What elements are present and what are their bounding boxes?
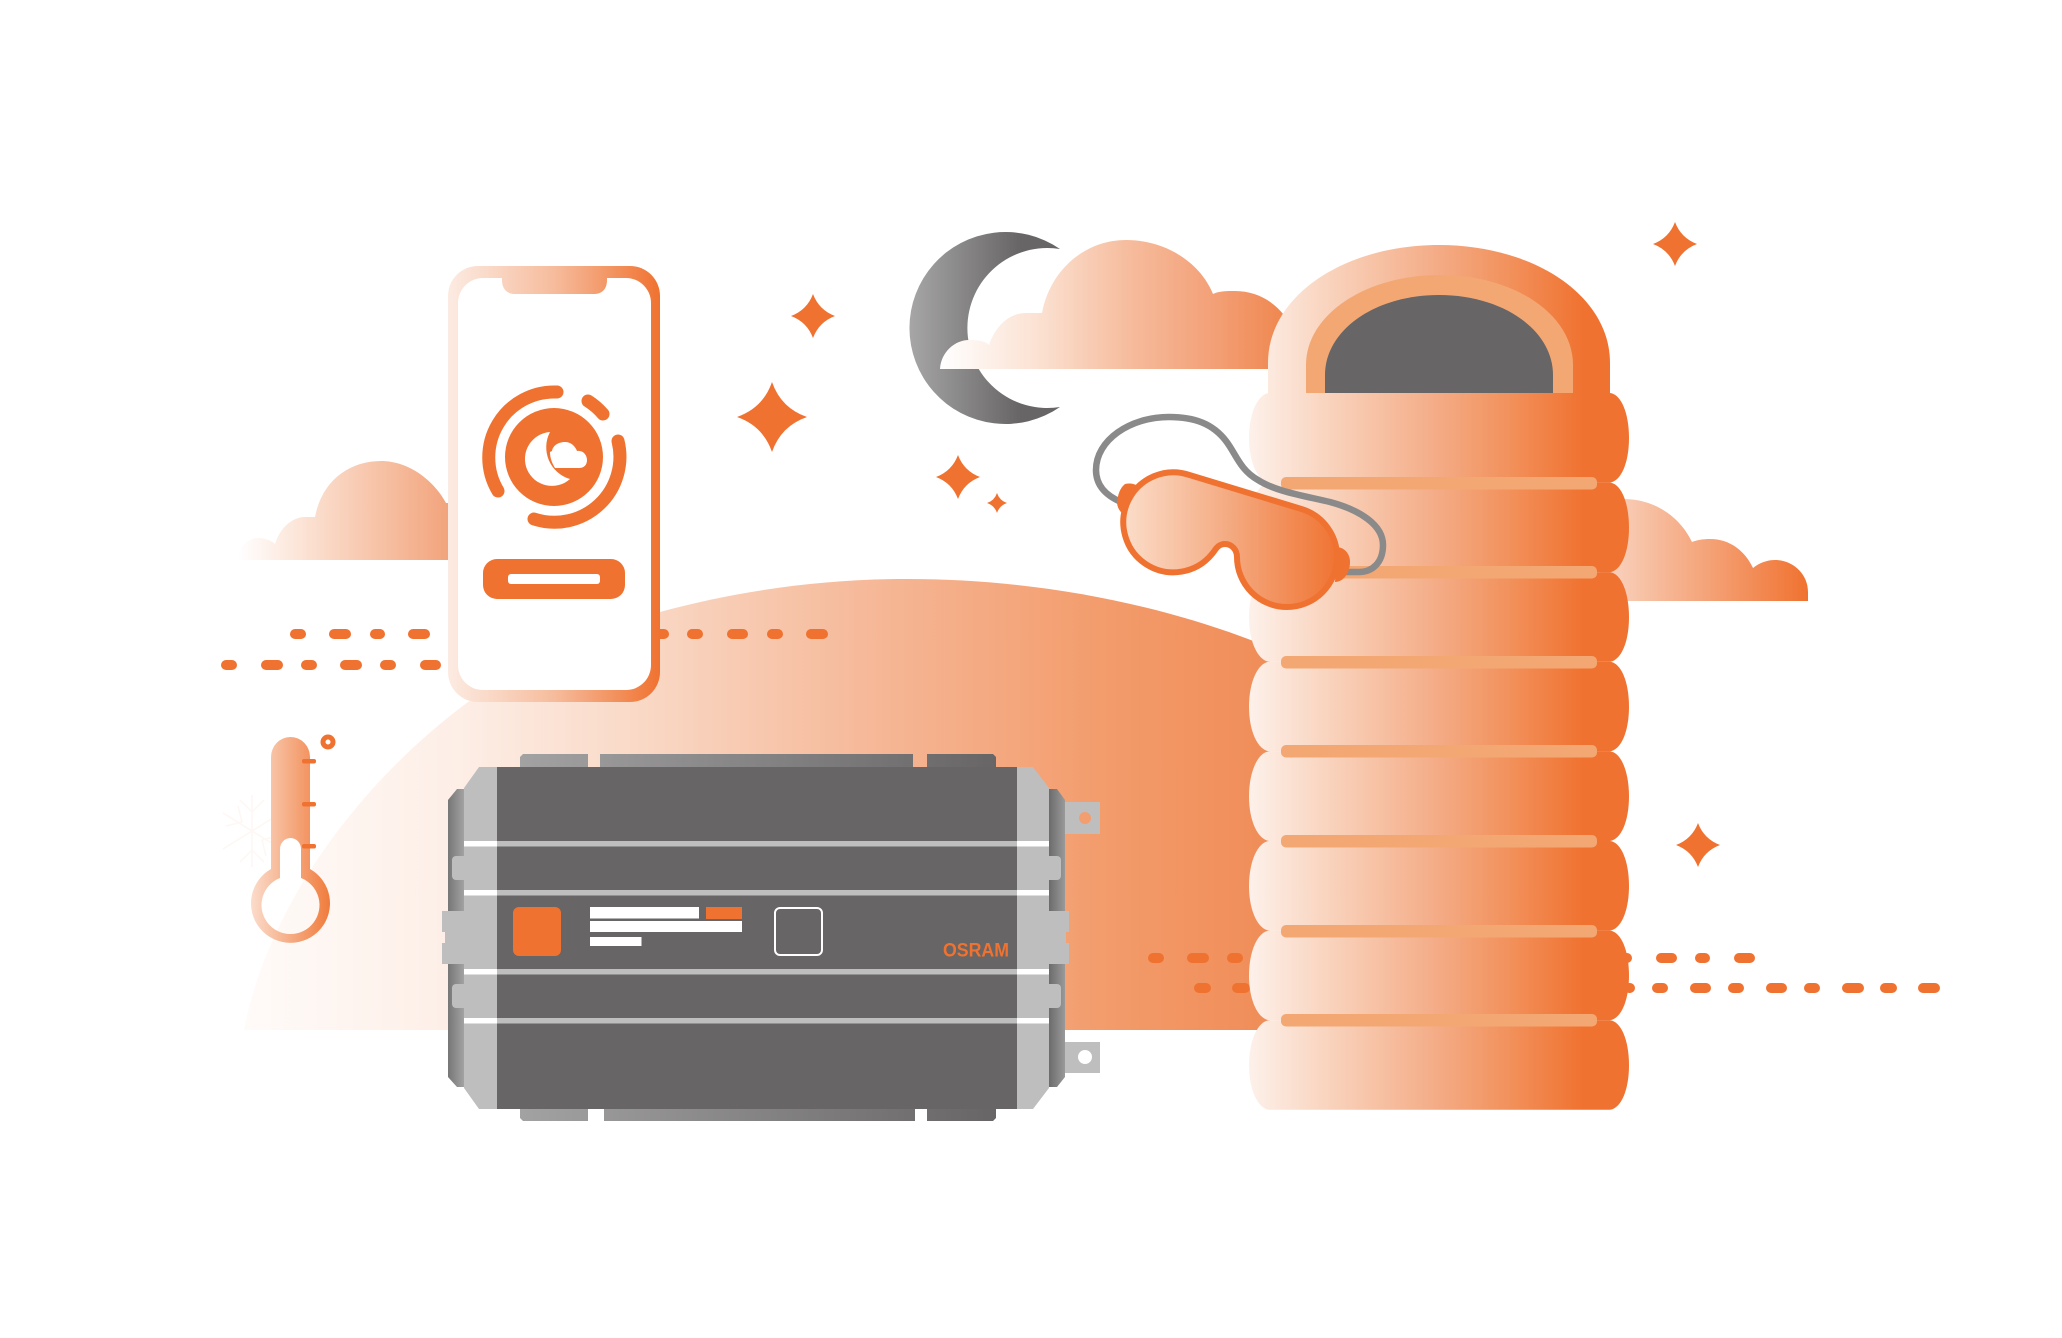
stars — [737, 222, 1720, 867]
side panels — [464, 767, 497, 1109]
mounting lugs — [1065, 802, 1100, 834]
side clips — [442, 856, 1069, 1008]
background hill — [244, 579, 1270, 1030]
sleeping bag segments — [1249, 393, 1629, 1110]
sleeping bag — [1249, 245, 1629, 1110]
icon: thermometer — [251, 737, 333, 943]
mask ear blobs — [1117, 483, 1350, 582]
sleeping bag seams — [1281, 477, 1597, 1026]
sleep mask — [1096, 417, 1383, 607]
sleeping bag hood — [1268, 245, 1610, 400]
dashed lines: upper left — [221, 629, 828, 670]
side strips — [448, 789, 464, 1087]
icon: faint snowflake — [223, 795, 281, 867]
phone button — [483, 559, 625, 599]
main body — [497, 767, 1017, 1109]
phone — [448, 266, 660, 702]
inverter box — [442, 754, 1100, 1121]
cloud: middle — [940, 240, 1300, 369]
cloud: right — [1600, 499, 1808, 601]
phone app icon: moon and cloud dial — [489, 392, 620, 522]
ribs — [464, 841, 1049, 1024]
brand name: OSRAM — [943, 940, 1009, 962]
phone notch — [502, 270, 607, 294]
top and bottom tabs — [520, 754, 996, 1121]
label panel — [513, 907, 822, 956]
cloud: left — [238, 461, 450, 560]
crescent moon — [909, 232, 1060, 424]
dashed lines: lower right — [1148, 953, 1940, 993]
mask strap — [1096, 417, 1383, 572]
mask body — [1123, 472, 1337, 607]
